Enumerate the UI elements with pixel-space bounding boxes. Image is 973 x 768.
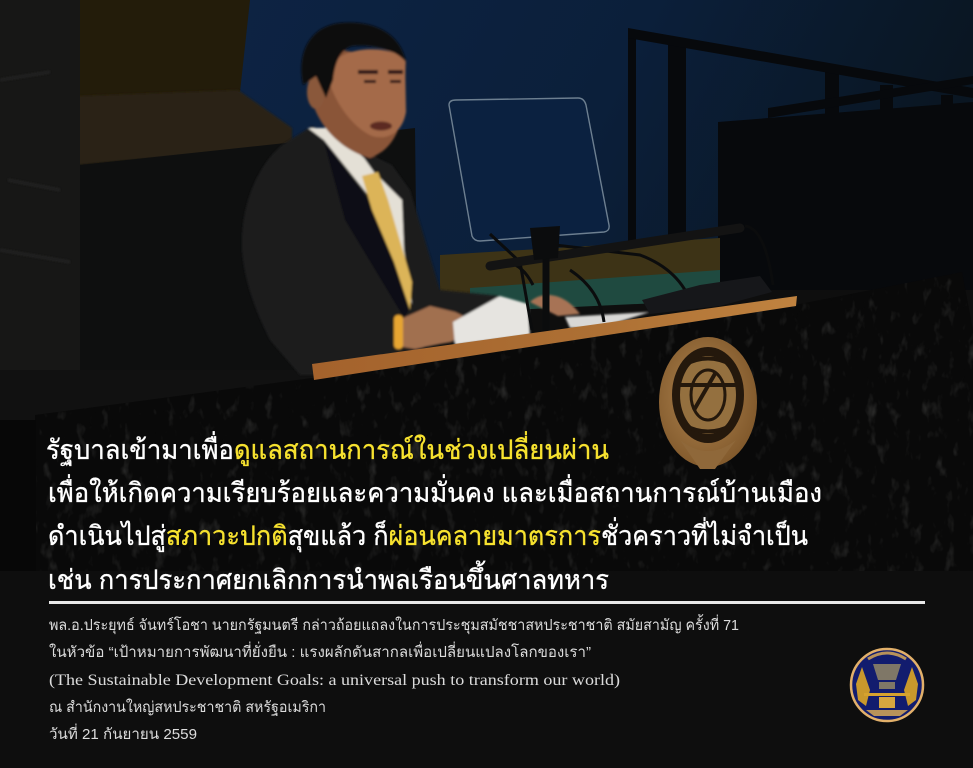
caption line 5: วันที่ 21 กันยายน 2559 [49, 723, 197, 743]
icon: Thai government seal [851, 649, 923, 721]
right hand [530, 295, 580, 316]
headline [46, 431, 822, 595]
dark caption band [0, 571, 973, 768]
headline line 4: เช่น การประกาศยกเลิกการนำพลเรือนขึ้นศาลทหาร [48, 560, 609, 595]
left dark pillar [0, 0, 80, 372]
speaker [242, 23, 650, 375]
papers [453, 296, 530, 345]
tie [362, 172, 412, 310]
headline line 3: ดำเนินไปสู่สภาวะปกติสุขแล้ว ก็ผ่อนคลายมาตรการชั่วคราวที่ไม่จำเป็น [48, 517, 808, 553]
wood top strip [312, 296, 797, 380]
caption line 2: ในหัวข้อ “เป้าหมายการพัฒนาที่ยั่งยืน : แรงผลักดันสากลเพื่อเปลี่ยนแปลงโลกของเรา” [49, 641, 591, 661]
divider line [49, 601, 925, 604]
dark lower left [0, 370, 320, 430]
blue wall [235, 0, 973, 290]
lapel shadow [324, 142, 412, 318]
microphones and stand [490, 226, 773, 400]
hair [301, 23, 406, 98]
shirt collar [308, 128, 412, 305]
caption line 4: ณ สำนักงานใหญ่สหประชาชาติ สหรัฐอเมริกา [49, 698, 326, 716]
green floor [470, 270, 720, 312]
headline line 1: รัฐบาลเข้ามาเพื่อดูแลสถานการณ์ในช่วงเปลี่ยนผ่าน [46, 431, 609, 466]
headline line 2: เพื่อให้เกิดความเรียบร้อยและความมั่นคง และเมื่อสถานการณ์บ้านเมือง [48, 474, 822, 508]
dark right balustrade [628, 28, 973, 290]
olive panel [75, 0, 250, 98]
caption line 1: พล.อ.ประยุทธ์ จันทร์โอชา นายกรัฐมนตรี กล่าวถ้อยแถลงในการประชุมสมัชชาสหประชาชาติ สมัยสามัญ ครั้งที่ 71 [49, 614, 739, 635]
marble front [35, 272, 973, 572]
caption text [49, 614, 739, 743]
caption line 3: (The Sustainable Development Goals: a universal push to transform our world) [49, 672, 620, 689]
ear [307, 75, 325, 109]
UN emblem [659, 337, 757, 469]
tan floor band [440, 238, 720, 296]
neck and face [312, 50, 406, 158]
tan ledge [78, 90, 292, 165]
eyes, nose and mouth [358, 70, 403, 130]
podium [0, 270, 973, 572]
teleprompter glass [449, 98, 609, 241]
hand with wristband [394, 306, 476, 349]
black block behind speaker [80, 128, 480, 370]
suit [242, 126, 530, 375]
